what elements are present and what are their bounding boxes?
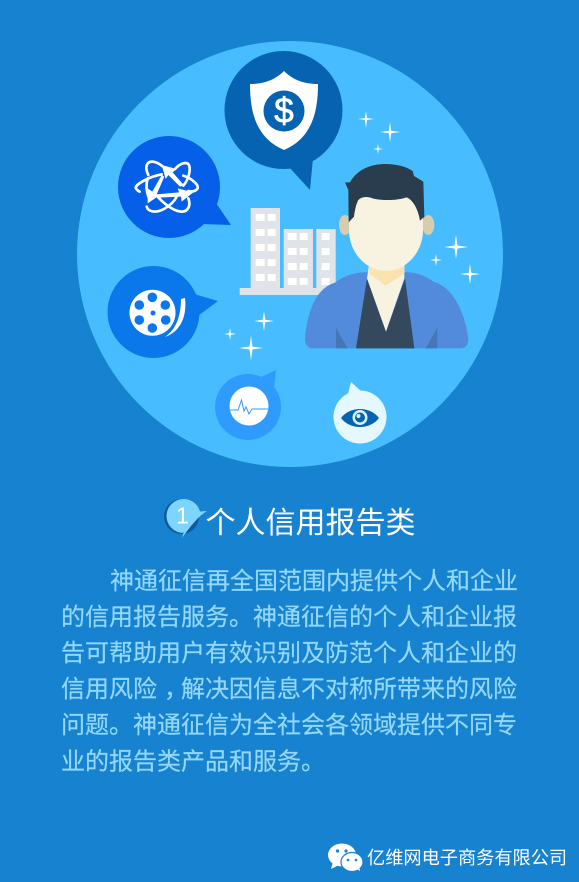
number badge xyxy=(164,499,207,538)
icon: film reel speech bubble xyxy=(108,266,218,358)
icon: wechat logo xyxy=(328,844,363,872)
body paragraph: 业的报告类产品和服务。 xyxy=(61,748,325,776)
heading with number badge xyxy=(164,499,416,540)
icon: shield dollar speech bubble: $ xyxy=(274,92,294,130)
body paragraph: 信用风险 ，解决因信息不对称所带来的风险 xyxy=(61,676,517,703)
icon: eye speech bubble xyxy=(334,382,386,444)
body paragraph: 神通征信再全国范围内提供个人和企业 xyxy=(110,568,518,595)
illustration: credit report scene xyxy=(77,41,503,467)
title: 个人信用报告类 xyxy=(206,507,416,540)
body paragraph: 的信用报告服务。神通征信的个人和企业报 xyxy=(61,604,517,631)
large light blue circle xyxy=(77,41,503,467)
number badge: 1 xyxy=(176,502,189,528)
icon: pulse monitor speech bubble xyxy=(215,370,281,440)
footer credit xyxy=(328,844,567,872)
body paragraph xyxy=(61,568,518,776)
body paragraph: 告可帮助用户有效识别及防范个人和企业的 xyxy=(61,640,517,667)
icon: atom arrows speech bubble xyxy=(118,136,231,238)
icon: shield dollar speech bubble xyxy=(224,51,342,190)
icon: office buildings xyxy=(240,208,336,295)
body paragraph: 问题。神通征信为全社会各领域提供不同专 xyxy=(61,712,517,739)
footer text: 亿维网电子商务有限公司 xyxy=(367,848,567,868)
person in suit xyxy=(305,164,468,348)
sparkles xyxy=(224,111,480,360)
